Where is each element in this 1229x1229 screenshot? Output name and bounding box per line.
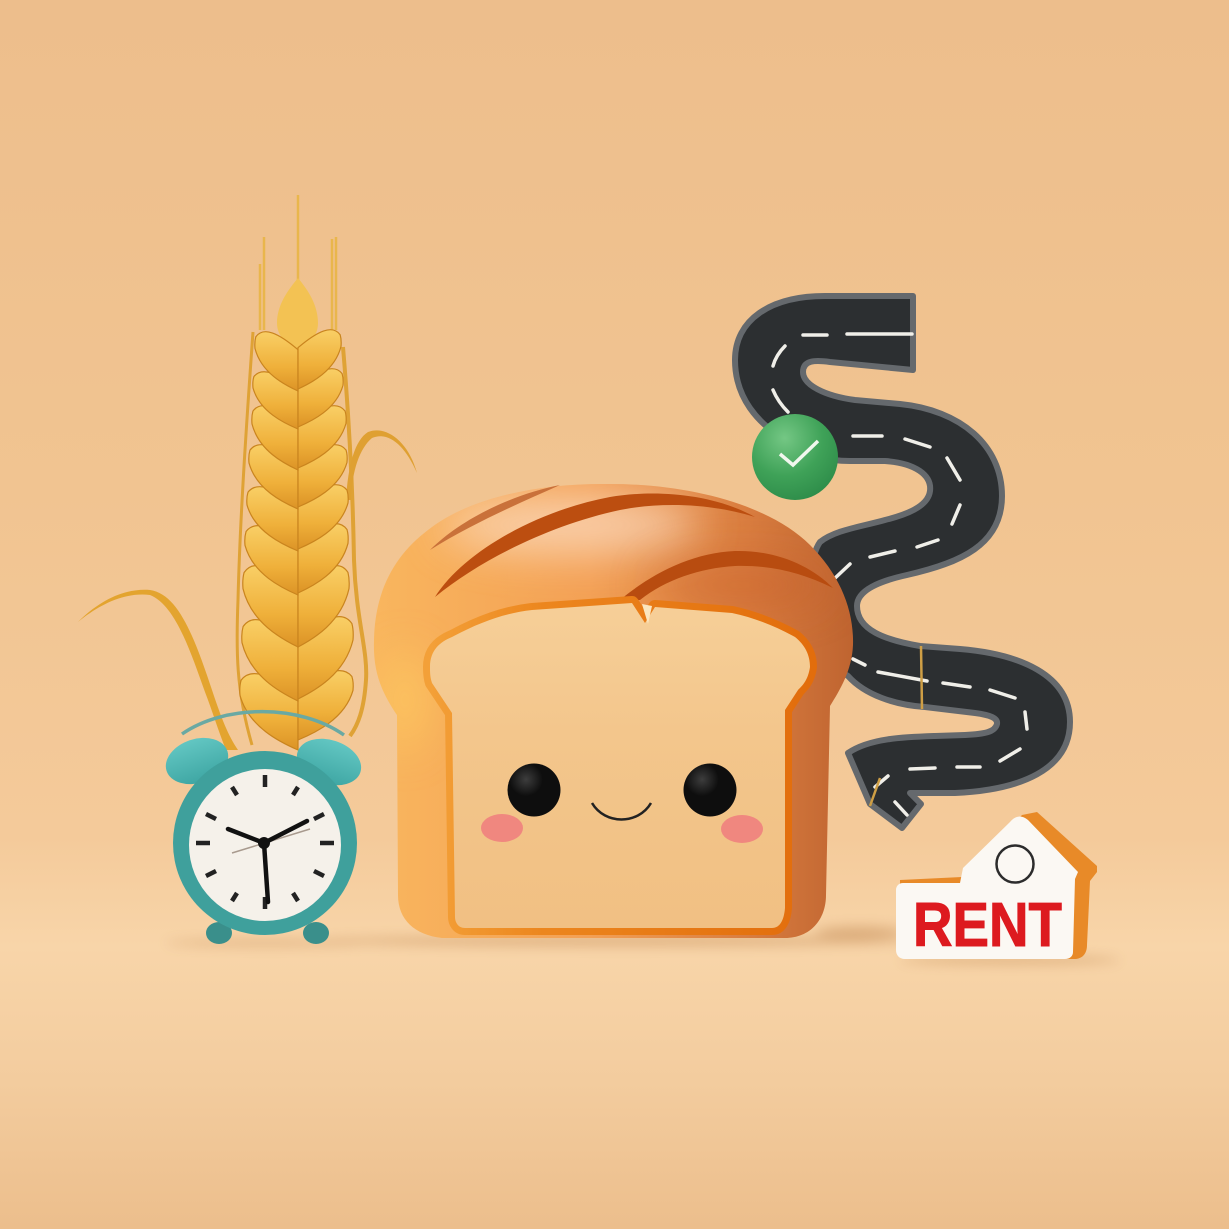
bread character <box>374 484 853 938</box>
icon: green check badge <box>752 414 838 500</box>
bread slice face <box>430 603 810 928</box>
ground shadow <box>165 926 1120 964</box>
crust slash marks <box>430 485 833 600</box>
rent label: RENT <box>913 891 1062 960</box>
crust notch highlight <box>642 604 652 624</box>
icon: winding road <box>735 296 1070 828</box>
bread loaf crust <box>374 484 853 938</box>
eyes <box>508 764 736 816</box>
smile <box>592 803 651 820</box>
icon: alarm clock <box>160 712 367 944</box>
icon: wheat stalk <box>78 195 417 750</box>
cheeks <box>481 814 763 843</box>
icon: rent house sign <box>896 812 1097 960</box>
